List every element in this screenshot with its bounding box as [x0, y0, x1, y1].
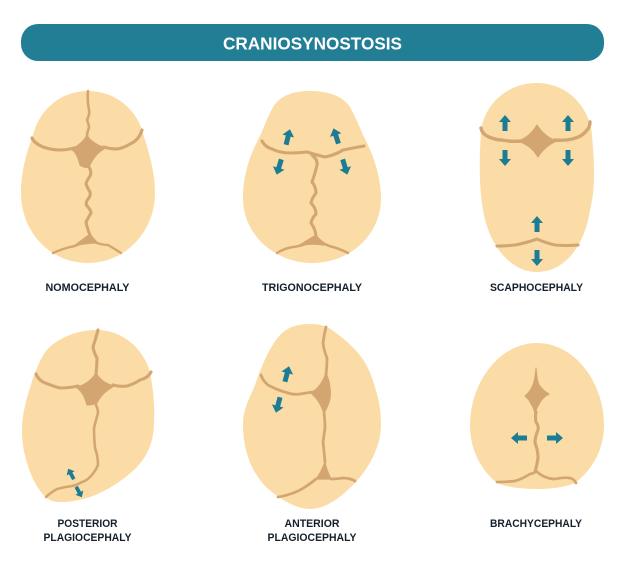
skull: scaphocephaly: [480, 83, 594, 272]
label: anterior plagiocephaly: [268, 518, 357, 544]
panel: scaphocephaly: [480, 83, 594, 294]
title banner: CRANIOSYNOSTOSIS: [223, 34, 402, 54]
arrow: upper left down: [499, 150, 511, 166]
label: nomocephaly: NOMOCEPHALY: [46, 282, 130, 294]
arrow: up right: [280, 128, 296, 146]
label: posterior plagiocephaly: PLAGIOCEPHALY: [44, 532, 132, 544]
skull: posterior plagiocephaly: [22, 330, 154, 502]
label: posterior plagiocephaly: POSTERIOR: [58, 518, 118, 530]
label: anterior plagiocephaly: ANTERIOR: [284, 518, 340, 530]
arrow: lower down: [531, 250, 543, 266]
panel: anterior plagiocephaly: [243, 324, 381, 544]
arrow: upper right up: [562, 115, 574, 131]
label: scaphocephaly: SCAPHOCEPHALY: [490, 282, 584, 294]
arrow: down right: [72, 485, 86, 499]
arrow: right: [547, 432, 563, 444]
arrow: up left: [328, 127, 344, 145]
label: posterior plagiocephaly: [44, 518, 132, 544]
skull: anterior plagiocephaly: [243, 324, 381, 509]
arrow: down left: [270, 396, 286, 414]
arrow: up left: [64, 467, 78, 481]
panel: posterior plagiocephaly: [22, 330, 154, 544]
panel: nomocephaly: [21, 91, 155, 294]
arrow: lower up: [531, 216, 543, 232]
label: brachycephaly: BRACHYCEPHALY: [490, 518, 583, 530]
arrow: down right: [337, 158, 353, 176]
title banner: [21, 24, 604, 61]
skull: nomocephaly: [21, 91, 155, 263]
arrow: upper right down: [562, 150, 574, 166]
label: trigonocephaly: TRIGONOCEPHALY: [262, 282, 363, 294]
skull: brachycephaly: [470, 343, 604, 489]
skull: trigonocephaly: [243, 91, 381, 263]
arrow: up right: [279, 365, 295, 383]
panel: trigonocephaly: [243, 91, 381, 294]
arrow: left: [511, 432, 527, 444]
label: anterior plagiocephaly: PLAGIOCEPHALY: [268, 532, 357, 544]
panel: brachycephaly: [470, 343, 604, 530]
arrow: upper left up: [499, 115, 511, 131]
arrow: down left: [271, 158, 287, 176]
